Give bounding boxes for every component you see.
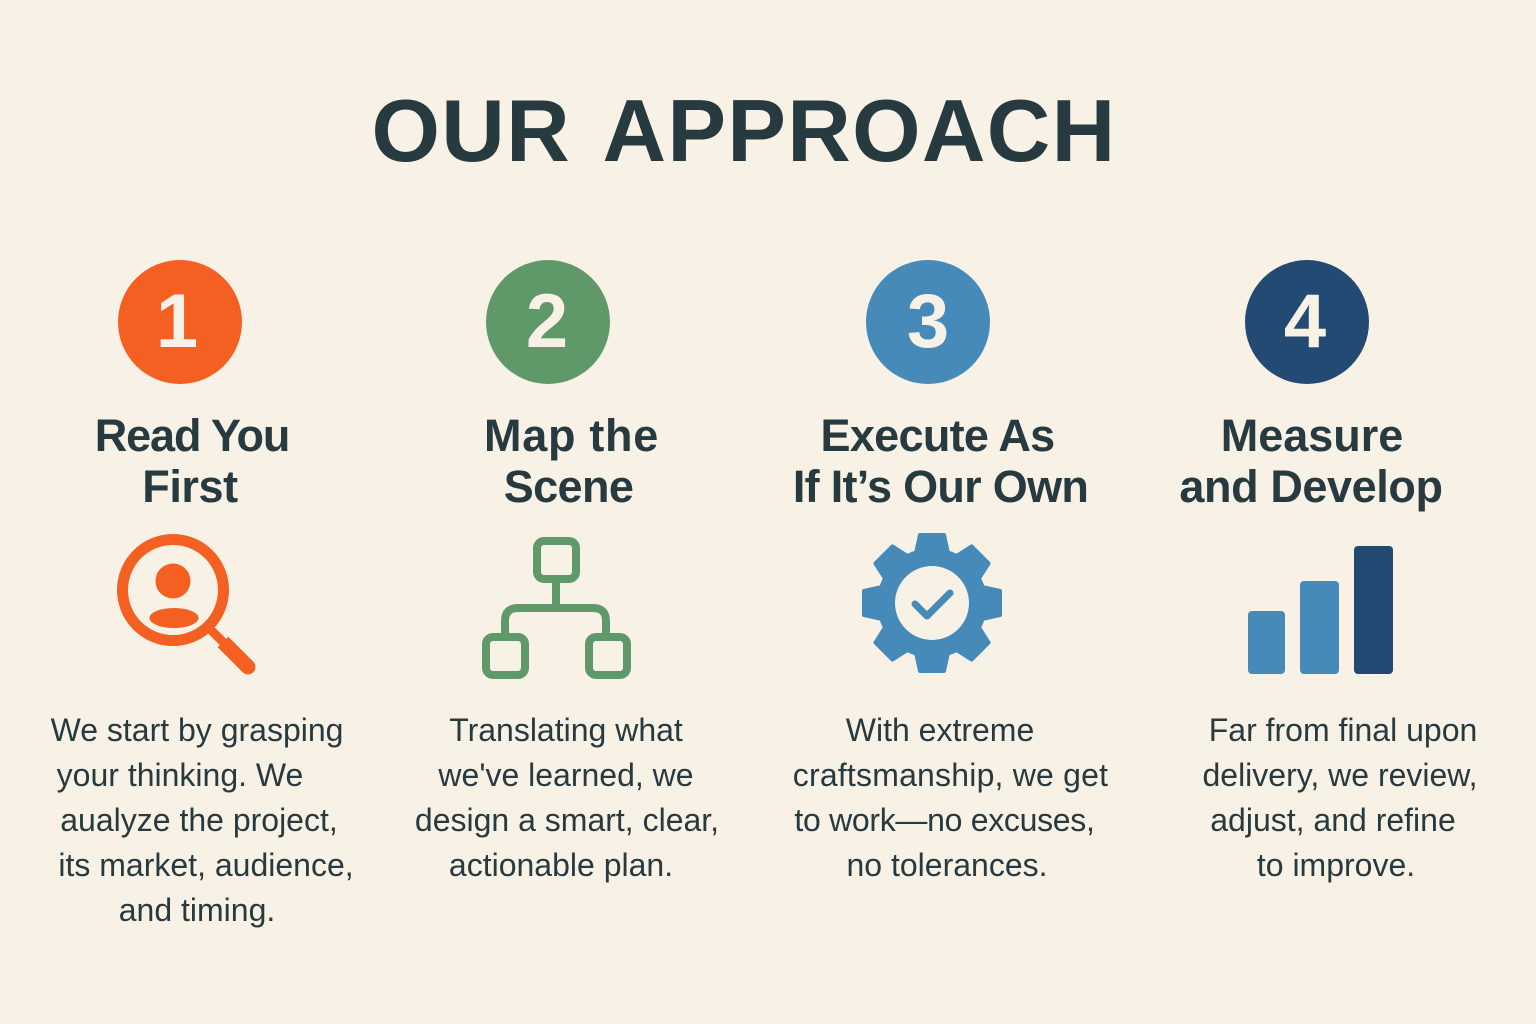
step 4 heading: and Develop [1179,461,1443,512]
step 2 description: design a smart, clear, [415,802,719,838]
step 4 description: Far from final upon [1209,712,1477,748]
step 2 description: actionable plan. [449,847,673,883]
step 1 description: aualyze the project, [60,802,338,838]
step 4 heading [1179,410,1443,512]
step 3 description: With extreme [846,712,1034,748]
step 1 description: and timing. [119,892,275,928]
step 4 number badge: 4 [1284,279,1326,364]
step 2 heading: Scene [504,461,633,512]
step 3 heading: Execute As [821,410,1054,461]
step 4 description: to improve. [1257,847,1415,883]
step 1 description: its market, audience, [58,847,354,883]
step 2 number badge [486,260,610,384]
icon: bar chart [1248,546,1393,674]
step 4 description [1202,712,1478,883]
step 3 heading: If It’s Our Own [793,461,1088,512]
step 3 number badge: 3 [907,279,949,364]
title: OUR APPROACH [372,81,1116,180]
step 1 number badge [118,260,242,384]
step 3 description: to work—no excuses, [794,802,1095,838]
icon: gear with check [862,533,1002,673]
step 4 description: adjust, and refine [1210,802,1456,838]
step 1 heading [95,410,289,512]
step 3 description: craftsmanship, we get [793,757,1108,793]
step 1 description [50,712,354,928]
step 3 heading [793,410,1088,512]
step 2 description: Translating what [449,712,683,748]
step 1 description: your thinking. We [57,757,303,793]
step 1 description: We start by grasping [51,712,343,748]
step 1 heading: Read You [95,410,289,461]
step 3 description: no tolerances. [846,847,1048,883]
step 3 number badge [866,260,990,384]
step 4 heading: Measure [1221,410,1403,461]
step 4 description: delivery, we review, [1202,757,1478,793]
icon: magnifier with person [117,534,256,674]
step 4 number badge [1245,260,1369,384]
step 2 heading: Map the [484,410,659,461]
step 3 description [793,712,1108,883]
icon: flow chart [482,537,631,679]
step 2 description: we've learned, we [438,757,694,793]
step 2 heading [484,410,659,512]
step 1 number badge: 1 [156,279,198,364]
step 1 heading: First [142,461,238,512]
step 2 description [415,712,719,883]
step 2 number badge: 2 [526,279,568,364]
